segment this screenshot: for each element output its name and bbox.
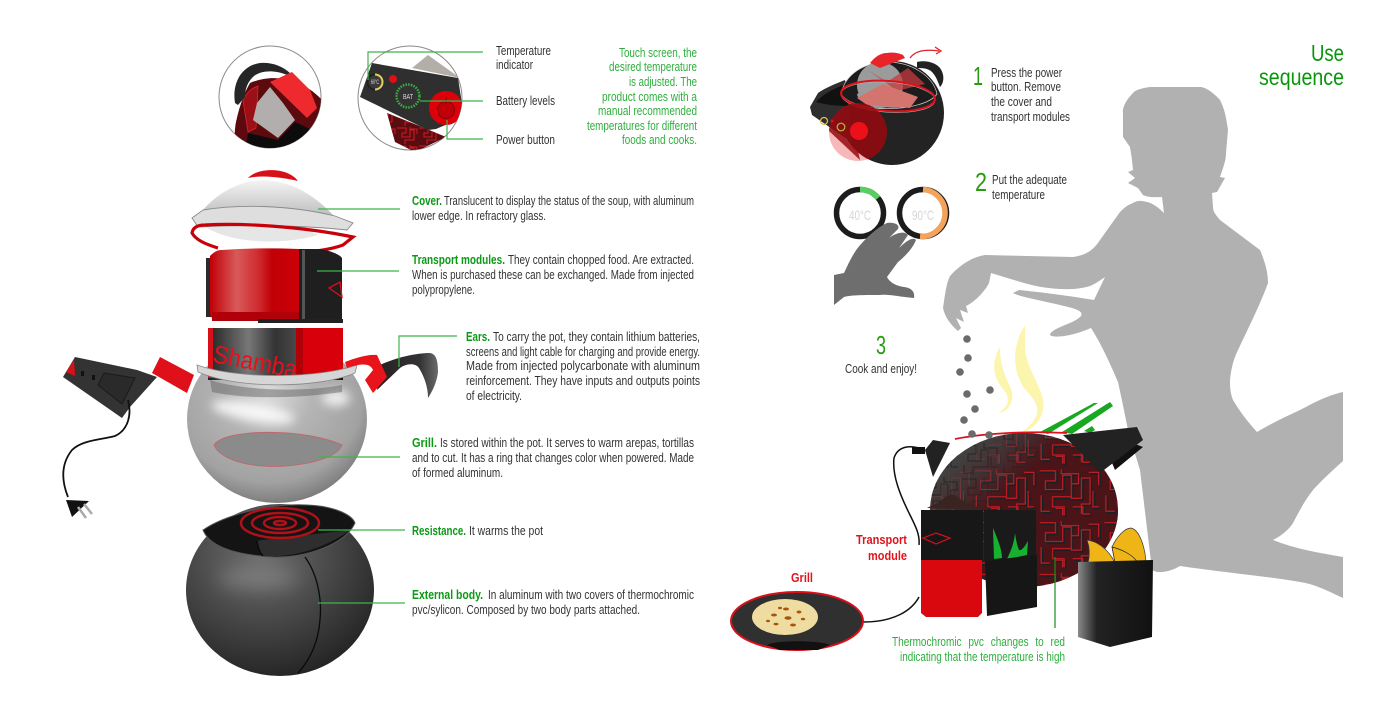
cup with chips xyxy=(1078,528,1153,647)
text: ears: reinforcement. They have inputs and outputs points xyxy=(466,374,700,388)
text: grill: Grill. xyxy=(412,436,437,450)
step 1 text: Press the power xyxy=(991,66,1062,80)
text: grill xyxy=(412,436,694,480)
text: cover: lower edge. In refractory glass. xyxy=(412,209,546,223)
part: pot with grill inside: Shamba xyxy=(211,340,300,384)
part: external body with resistance xyxy=(186,504,374,676)
text: ears: To carry the pot, they contain lithium batteries, xyxy=(493,330,700,344)
detail circle: control panel: 60°C xyxy=(371,80,379,86)
note: touch screen: is adjusted. The xyxy=(629,75,697,89)
step 1 text: transport modules xyxy=(991,110,1070,124)
text: transport modules: They contain chopped food. Are extracted. xyxy=(508,253,694,267)
note: touch screen xyxy=(587,46,697,147)
step 2 text: temperature xyxy=(992,188,1045,202)
heading: use sequence: Use xyxy=(1311,40,1344,66)
label: transport module: Transport xyxy=(856,533,908,547)
cable to pot xyxy=(863,447,925,622)
step 1 text: button. Remove xyxy=(991,80,1061,94)
text: ears xyxy=(466,330,700,403)
note: touch screen: temperatures for different xyxy=(587,119,697,133)
text: ears: Ears. xyxy=(466,330,490,344)
text: ears: screens and light cable for charging and provide energy. xyxy=(466,345,700,359)
text: grill: of formed aluminum. xyxy=(412,466,503,480)
leader lines for control panel xyxy=(368,52,483,139)
text: external body: In aluminum with two covers of thermochromic xyxy=(488,588,694,602)
heading: use sequence xyxy=(1259,40,1344,90)
part: pot with grill inside xyxy=(187,328,367,503)
label: temperature indicator xyxy=(496,44,551,72)
text: grill: Is stored within the pot. It serves to warm arepas, tortillas xyxy=(440,436,694,450)
text: transport modules xyxy=(412,253,694,297)
cooking scene xyxy=(731,402,1153,650)
arrow: lift cover xyxy=(910,47,941,58)
step 1: open pot illustration xyxy=(810,53,944,165)
step 2 text xyxy=(975,167,1067,202)
grill inside the pot xyxy=(214,432,342,466)
note: thermochromic pvc xyxy=(892,635,1065,664)
note: thermochromic pvc: indicating that the temperature is high xyxy=(900,650,1065,664)
step 3 text xyxy=(845,330,917,376)
text: cover xyxy=(412,194,694,223)
ring: 90 degrees: 90°C xyxy=(912,207,934,223)
detail circle: control panel xyxy=(358,46,464,152)
label: battery levels: Battery levels xyxy=(496,94,555,108)
part: right ear xyxy=(345,353,438,398)
label: transport module xyxy=(856,533,908,563)
ring: 40 degrees: 40°C xyxy=(849,207,871,223)
panel: exploded pot view xyxy=(63,44,700,676)
text: transport modules: When is purchased these can be exchanged. Made from injected xyxy=(412,268,694,282)
part: transport modules xyxy=(206,248,343,323)
step 3 text: Cook and enjoy! xyxy=(845,362,917,376)
leader lines for parts xyxy=(317,209,457,603)
text: external body: pvc/sylicon. Composed by two body parts attached. xyxy=(412,603,640,617)
note: touch screen: desired temperature xyxy=(609,60,697,74)
text: cover: Cover. xyxy=(412,194,442,208)
heading: use sequence: sequence xyxy=(1259,64,1344,90)
text: resistance: Resistance. xyxy=(412,524,466,538)
note: touch screen: manual recommended xyxy=(598,104,697,118)
text: external body: External body. xyxy=(412,588,483,602)
step 2 text: Put the adequate xyxy=(992,173,1067,187)
note: touch screen: foods and cooks. xyxy=(622,133,697,147)
icon: hand xyxy=(834,223,916,305)
part: lid xyxy=(192,170,353,252)
note: touch screen: product comes with a xyxy=(602,90,697,104)
step 2: temperature rings and hand xyxy=(834,190,946,305)
grill xyxy=(731,592,863,650)
label: temperature indicator: indicator xyxy=(496,58,533,72)
detail circle: lid and module xyxy=(219,46,322,150)
steam flames xyxy=(994,325,1043,432)
note: touch screen: Touch screen, the xyxy=(619,46,697,60)
text: external body xyxy=(412,588,694,617)
hot pot xyxy=(925,427,1143,590)
note: thermochromic pvc: Thermochromic pvc changes to red xyxy=(892,635,1065,649)
part: left ear with cable xyxy=(63,357,194,518)
falling seasoning dots xyxy=(956,335,994,439)
text: transport modules: polypropylene. xyxy=(412,283,475,297)
step 1 text xyxy=(973,61,1070,124)
label: temperature indicator: Temperature xyxy=(496,44,551,58)
label: power button: Power button xyxy=(496,133,555,147)
module with herbs xyxy=(984,510,1037,616)
label: grill: Grill xyxy=(791,571,813,585)
text: resistance: It warms the pot xyxy=(469,524,543,538)
text: ears: Made from injected polycarbonate with aluminum xyxy=(466,359,700,373)
text: grill: and to cut. It has a ring that changes color when powered. Made xyxy=(412,451,694,465)
resistance coil xyxy=(241,508,319,538)
detail circle: control panel: BAT xyxy=(403,94,414,101)
text: ears: of electricity. xyxy=(466,389,522,403)
step 1 text: the cover and xyxy=(991,95,1052,109)
step 3 text: 3 xyxy=(876,330,886,360)
label: transport module: module xyxy=(868,549,907,563)
text: transport modules: Transport modules. xyxy=(412,253,505,267)
leader line: thermochromic xyxy=(1054,557,1056,628)
step 1 text: 1 xyxy=(973,61,983,91)
text: resistance xyxy=(412,524,543,538)
silhouette: person seasoning the pot xyxy=(943,87,1343,598)
green sticks xyxy=(1040,402,1113,434)
step 2 text: 2 xyxy=(975,167,987,197)
module with food xyxy=(921,495,983,617)
text: cover: Translucent to display the status of the soup, with aluminum xyxy=(444,194,694,208)
